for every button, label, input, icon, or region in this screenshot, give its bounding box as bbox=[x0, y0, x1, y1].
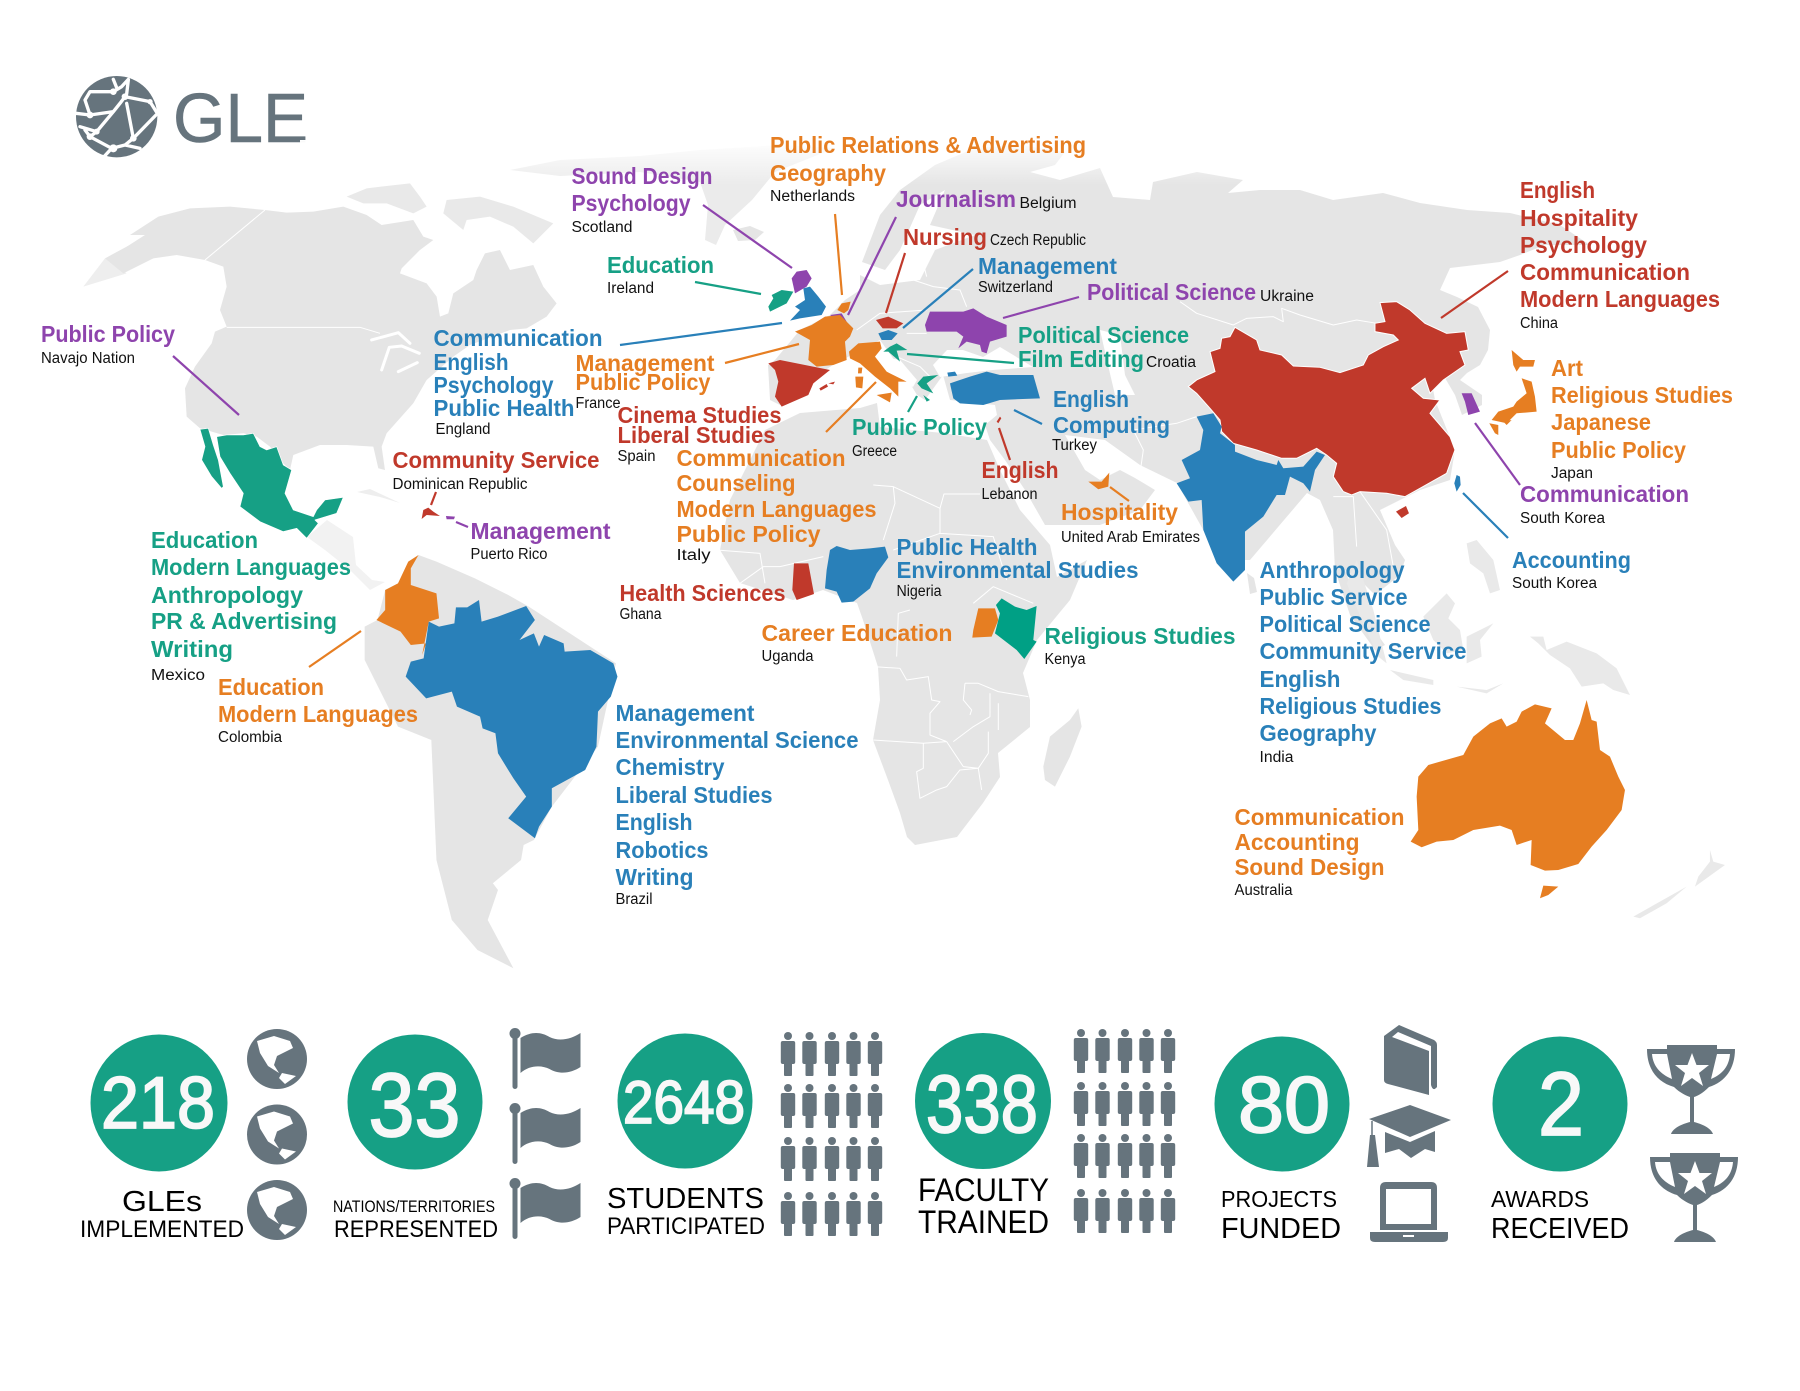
England bbox=[790, 287, 826, 321]
label: China: Psychology bbox=[1520, 232, 1647, 258]
label: Switzerland bbox=[978, 253, 1117, 296]
label: Colombia: Education bbox=[218, 674, 324, 700]
logo globe bbox=[76, 76, 157, 157]
label: Puerto Rico bbox=[470, 518, 611, 563]
Switzerland bbox=[878, 330, 898, 340]
label: South Korea: South Korea bbox=[1520, 510, 1605, 527]
label: Mexico: Modern Languages bbox=[151, 554, 351, 580]
label: Uganda bbox=[762, 620, 952, 665]
Croatia bbox=[883, 343, 907, 362]
label: Turkey: Turkey bbox=[1052, 437, 1097, 454]
stat: projects funded: FUNDED bbox=[1221, 1213, 1341, 1245]
Central America bbox=[307, 520, 385, 590]
stat: nations represented bbox=[333, 1034, 498, 1243]
label: Netherlands: Netherlands bbox=[770, 188, 855, 205]
label: India: Community Service bbox=[1260, 638, 1466, 664]
stat: GLEs implemented: 218 bbox=[101, 1063, 215, 1144]
Ireland bbox=[768, 290, 793, 312]
stat: awards received: RECEIVED bbox=[1491, 1213, 1629, 1245]
label: Italy: Public Policy bbox=[676, 521, 821, 547]
label: India: Public Service bbox=[1260, 584, 1408, 610]
Colombia bbox=[376, 555, 439, 655]
Caspian Sea bbox=[1100, 330, 1135, 395]
label: Spain: Liberal Studies bbox=[618, 422, 776, 448]
icon: flags bbox=[510, 1028, 580, 1239]
label: Dominican Republic bbox=[392, 447, 600, 493]
logo wordmark: GLE bbox=[173, 79, 308, 157]
Indonesia, New Guinea, New Zealand bbox=[1347, 540, 1725, 918]
stat: faculty trained: 338 bbox=[926, 1059, 1038, 1150]
label: Belgium: Belgium bbox=[1020, 195, 1076, 212]
stat: GLEs implemented: GLEs bbox=[122, 1186, 202, 1218]
Cuba bbox=[357, 489, 400, 503]
label: Australia bbox=[1234, 804, 1404, 899]
Madagascar bbox=[1043, 708, 1082, 787]
label: England: Communication bbox=[434, 325, 602, 351]
Great Lakes bbox=[372, 333, 419, 372]
stat: GLEs implemented: IMPLEMENTED bbox=[80, 1216, 244, 1243]
South Korea bbox=[1462, 393, 1480, 415]
label: Brazil: Writing bbox=[616, 864, 694, 890]
label: Scotland: Scotland bbox=[572, 219, 632, 236]
US and Canada border bbox=[205, 210, 380, 333]
label: England: England bbox=[436, 421, 490, 438]
Brazil bbox=[406, 600, 617, 838]
icon: laptop bbox=[1370, 1182, 1448, 1242]
label: Turkey: English bbox=[1053, 386, 1129, 412]
South America bbox=[365, 555, 616, 968]
label: United Arab Emirates: Hospitality bbox=[1061, 499, 1178, 525]
Japan bbox=[1489, 350, 1537, 435]
label: Mexico: Writing bbox=[151, 636, 233, 662]
label: Navajo Nation bbox=[41, 321, 175, 367]
label: Japan bbox=[1551, 355, 1733, 482]
stat: students participated: STUDENTS bbox=[607, 1183, 764, 1215]
label: Italy bbox=[676, 445, 876, 564]
country borders bbox=[205, 210, 1393, 798]
label: Spain: Cinema Studies bbox=[618, 402, 782, 428]
Arctic islands bbox=[347, 183, 553, 243]
Hainan bbox=[1396, 506, 1409, 518]
label: Czech Republic bbox=[903, 224, 1086, 250]
Kenya bbox=[995, 598, 1037, 659]
label: Japan: Japan bbox=[1551, 465, 1593, 482]
label: Ghana bbox=[620, 580, 786, 623]
Mexico bbox=[200, 428, 343, 538]
label: Mexico: Anthropology bbox=[151, 582, 303, 608]
icon: globes bbox=[247, 1029, 307, 1240]
stat: projects funded: 80 bbox=[1238, 1060, 1330, 1149]
label: Scotland bbox=[572, 163, 712, 236]
label: Kenya bbox=[1044, 623, 1236, 668]
label: Ghana: Health Sciences bbox=[620, 580, 786, 606]
label: Brazil: Environmental Science bbox=[616, 727, 858, 753]
Sri Lanka bbox=[1247, 573, 1257, 594]
label: Japan: Art bbox=[1551, 355, 1583, 381]
label: Kenya: Kenya bbox=[1044, 651, 1086, 668]
label: China: Communication bbox=[1520, 259, 1690, 285]
label: India: Religious Studies bbox=[1260, 693, 1442, 719]
label: Brazil: Chemistry bbox=[616, 754, 725, 780]
icon: graduation cap bbox=[1367, 1105, 1451, 1167]
Spain bbox=[768, 360, 835, 407]
label: Uganda: Uganda bbox=[762, 648, 814, 665]
label: England bbox=[434, 325, 602, 438]
label: Netherlands: Geography bbox=[770, 160, 886, 186]
label: Ireland: Ireland bbox=[607, 280, 654, 297]
label: Dominican Republic: Community Service bbox=[392, 447, 600, 473]
label: India: Geography bbox=[1260, 720, 1377, 746]
highlighted countries bbox=[200, 270, 1625, 898]
label: United Arab Emirates: United Arab Emirates bbox=[1061, 529, 1200, 546]
label: Spain bbox=[618, 402, 782, 465]
Eurasia bbox=[768, 145, 1590, 650]
label: Nigeria: Public Health bbox=[896, 534, 1038, 560]
label: China: Modern Languages bbox=[1520, 286, 1720, 312]
label: Brazil bbox=[616, 700, 858, 908]
Lebanon bbox=[997, 417, 1001, 423]
stat: awards received bbox=[1491, 1036, 1629, 1245]
label: Brazil: English bbox=[616, 809, 692, 835]
label: Belgium bbox=[896, 186, 1076, 212]
stat: projects funded: PROJECTS bbox=[1221, 1186, 1337, 1212]
label: Ireland: Education bbox=[607, 252, 714, 278]
label: England: English bbox=[434, 349, 508, 375]
label: Nigeria bbox=[896, 534, 1138, 600]
label: China: English bbox=[1520, 177, 1595, 203]
label: Kenya: Religious Studies bbox=[1044, 623, 1236, 649]
label: Spain: Spain bbox=[618, 448, 656, 465]
label: Brazil: Liberal Studies bbox=[616, 782, 772, 808]
label: China bbox=[1520, 177, 1720, 332]
label: Mexico bbox=[151, 527, 351, 684]
label: Turkey: Computing bbox=[1053, 412, 1170, 438]
label: Netherlands: Public Relations & Advertising bbox=[770, 132, 1086, 158]
label: Australia: Sound Design bbox=[1234, 854, 1384, 880]
India bbox=[1177, 413, 1325, 582]
France bbox=[795, 315, 853, 367]
icon: faculty bbox=[1074, 1029, 1175, 1233]
stat: faculty trained: FACULTY bbox=[918, 1172, 1049, 1208]
label: Switzerland: Switzerland bbox=[978, 279, 1053, 296]
stat: awards received: 2 bbox=[1538, 1055, 1584, 1155]
stat: GLEs implemented bbox=[80, 1034, 244, 1243]
map north fade bbox=[300, 140, 1600, 185]
label: Japan: Religious Studies bbox=[1551, 382, 1733, 408]
label: Navajo Nation: Navajo Nation bbox=[41, 350, 135, 367]
label: Japan: Japanese bbox=[1551, 409, 1651, 435]
label: Greece: Public Policy bbox=[852, 414, 987, 440]
label: England: Public Health bbox=[434, 395, 574, 421]
label: Ukraine: Political Science bbox=[1087, 279, 1256, 305]
label: Mexico: Mexico bbox=[151, 667, 205, 684]
label: Taiwan accounting: South Korea bbox=[1512, 575, 1597, 592]
Africa bbox=[720, 403, 1087, 845]
label: India: Political Science bbox=[1260, 611, 1430, 637]
label: Mexico: Education bbox=[151, 527, 258, 553]
Taiwan bbox=[1454, 475, 1461, 492]
label: India bbox=[1260, 557, 1466, 766]
label: Italy: Counseling bbox=[676, 470, 796, 496]
label: Netherlands bbox=[770, 132, 1086, 205]
label: Colombia: Modern Languages bbox=[218, 701, 418, 727]
Italy bbox=[849, 342, 907, 402]
leader lines bbox=[173, 205, 1520, 667]
world map base bbox=[83, 145, 1725, 968]
label: Lebanon bbox=[982, 457, 1058, 503]
label: South Korea: Communication bbox=[1520, 481, 1689, 507]
label: Italy: Communication bbox=[676, 445, 846, 471]
Puerto Rico bbox=[446, 516, 455, 519]
label: Navajo Nation: Public Policy bbox=[41, 321, 175, 347]
Adriatic Sea bbox=[883, 357, 917, 387]
label: Brazil: Robotics bbox=[616, 837, 708, 863]
stat: awards received: AWARDS bbox=[1491, 1186, 1589, 1212]
label: Switzerland: Management bbox=[978, 253, 1117, 279]
label: Scotland: Sound Design bbox=[572, 163, 712, 189]
label: Lebanon: English bbox=[982, 457, 1058, 483]
label: Belgium: Journalism bbox=[896, 186, 1016, 212]
label: Puerto Rico: Puerto Rico bbox=[470, 546, 548, 563]
Europe borders bbox=[857, 223, 967, 377]
Europe countries bbox=[768, 270, 1109, 489]
label: Scotland: Psychology bbox=[572, 190, 691, 216]
North America bbox=[83, 183, 557, 470]
label: Puerto Rico: Management bbox=[470, 518, 611, 544]
Africa countries bbox=[792, 546, 1037, 659]
stat: students participated bbox=[607, 1034, 765, 1240]
label: Nigeria: Nigeria bbox=[896, 583, 942, 600]
United Arab Emirates bbox=[1088, 473, 1109, 489]
Ukraine bbox=[925, 308, 1007, 353]
label: China: China bbox=[1520, 315, 1558, 332]
Black Sea bbox=[933, 347, 1033, 377]
label: Australia: Accounting bbox=[1234, 829, 1360, 855]
label: Ireland bbox=[607, 252, 714, 297]
label: Brazil: Brazil bbox=[616, 891, 652, 908]
label: United Arab Emirates bbox=[1061, 499, 1200, 546]
label: Mexico: PR & Advertising bbox=[151, 608, 337, 634]
label: Uganda: Career Education bbox=[762, 620, 952, 646]
label: Australia: Communication bbox=[1234, 804, 1404, 830]
Africa borders bbox=[717, 485, 1033, 798]
label: Ghana: Ghana bbox=[620, 606, 662, 623]
Turkey bbox=[947, 372, 1040, 405]
label: Czech Republic: Czech Republic bbox=[990, 232, 1086, 249]
label: Australia: Australia bbox=[1234, 882, 1293, 899]
label: France: Management bbox=[576, 350, 715, 376]
label: Croatia: Political Science bbox=[1018, 322, 1189, 348]
label: Czech Republic: Nursing bbox=[903, 224, 987, 250]
icon: book bbox=[1384, 1025, 1437, 1095]
label: Croatia bbox=[1018, 322, 1196, 372]
label: Lebanon: Lebanon bbox=[982, 486, 1038, 503]
stat: faculty trained bbox=[915, 1033, 1051, 1240]
stat: projects funded bbox=[1214, 1036, 1350, 1245]
label: India: India bbox=[1260, 749, 1294, 766]
Ghana bbox=[792, 563, 814, 600]
label: Taiwan accounting bbox=[1512, 547, 1631, 592]
label: Italy: Italy bbox=[676, 547, 711, 564]
Belgium bbox=[830, 313, 847, 323]
label: Greece: Greece bbox=[852, 443, 897, 460]
stat: nations represented: NATIONS/TERRITORIES bbox=[333, 1197, 495, 1216]
label: Croatia: Film Editing bbox=[1018, 346, 1144, 372]
label: France: France bbox=[576, 395, 620, 412]
label: Taiwan accounting: Accounting bbox=[1512, 547, 1631, 573]
label: Turkey bbox=[1052, 386, 1170, 454]
stat: students participated: 2648 bbox=[623, 1069, 745, 1136]
label: Brazil: Management bbox=[616, 700, 755, 726]
label: Colombia: Colombia bbox=[218, 729, 282, 746]
label: Nigeria: Environmental Studies bbox=[896, 557, 1138, 583]
label: Greece bbox=[852, 414, 987, 460]
icon: students bbox=[781, 1032, 882, 1236]
label: India: Anthropology bbox=[1260, 557, 1405, 583]
label: Japan: Public Policy bbox=[1551, 437, 1686, 463]
Czech Republic bbox=[876, 317, 903, 328]
Dominican Republic bbox=[422, 508, 440, 519]
stat: students participated: PARTICIPATED bbox=[607, 1213, 765, 1240]
Greenland and Arctic bbox=[510, 145, 835, 245]
label: Ukraine: Ukraine bbox=[1260, 288, 1314, 305]
Scotland bbox=[792, 270, 812, 293]
Australia bbox=[1411, 700, 1625, 898]
logo: GLE bbox=[76, 76, 308, 157]
Netherlands bbox=[837, 302, 851, 313]
label: England: Psychology bbox=[434, 372, 554, 398]
label: France bbox=[576, 350, 715, 412]
label: South Korea bbox=[1520, 481, 1689, 527]
stat: nations represented: 33 bbox=[368, 1056, 460, 1156]
label: India: English bbox=[1260, 666, 1340, 692]
Nigeria bbox=[825, 546, 888, 603]
Iceland bbox=[733, 226, 764, 241]
Greece bbox=[917, 375, 938, 402]
stat: nations represented: REPRESENTED bbox=[334, 1216, 498, 1243]
Asia countries bbox=[1177, 302, 1537, 582]
China bbox=[1188, 302, 1468, 497]
stat: faculty trained: TRAINED bbox=[918, 1204, 1049, 1240]
label: France: Public Policy bbox=[576, 369, 711, 395]
icon: trophies bbox=[1647, 1045, 1738, 1242]
Asia borders bbox=[1133, 302, 1393, 567]
label: China: Hospitality bbox=[1520, 205, 1638, 231]
Uganda bbox=[972, 608, 998, 638]
label: Italy: Modern Languages bbox=[676, 496, 876, 522]
label: Colombia bbox=[218, 674, 418, 746]
label: Croatia: Croatia bbox=[1146, 354, 1196, 371]
label: Dominican Republic: Dominican Republic bbox=[392, 476, 528, 493]
